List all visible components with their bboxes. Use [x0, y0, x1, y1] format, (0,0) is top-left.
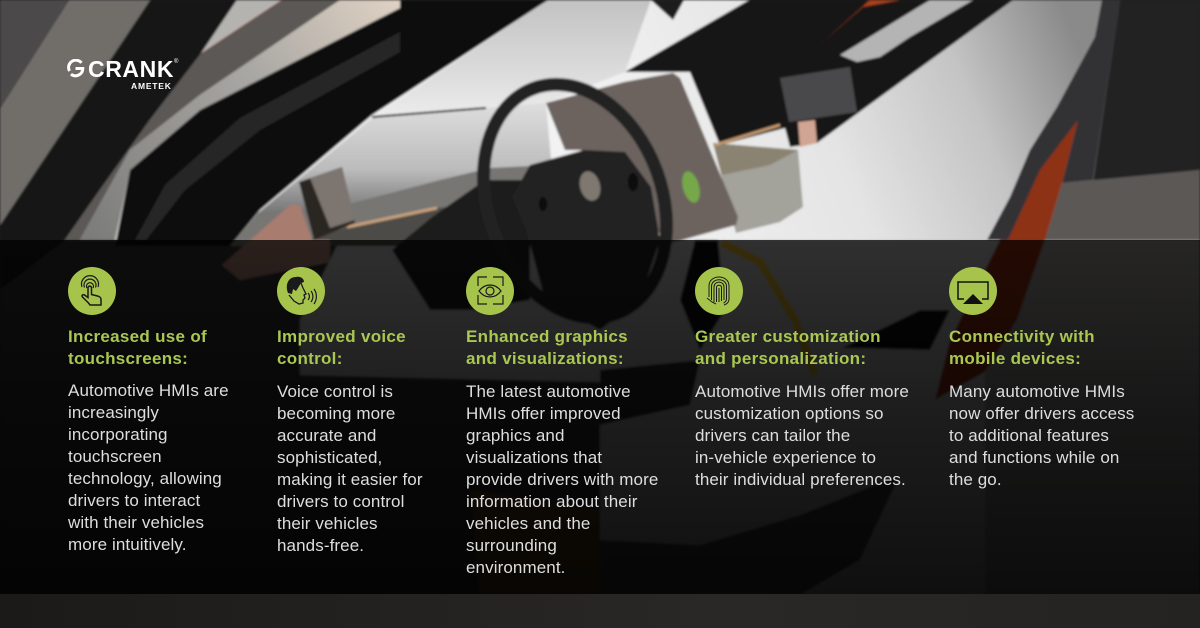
logo: Crank Ametek — [67, 56, 178, 91]
body text: becoming more — [277, 404, 395, 423]
body text: graphics and — [466, 426, 565, 445]
heading — [695, 327, 881, 368]
icon: screen mirroring — [949, 267, 997, 315]
heading: mobile devices: — [949, 349, 1081, 368]
body text: hands-free. — [277, 536, 364, 555]
body text: drivers to interact — [68, 491, 200, 510]
heading: Enhanced graphics — [466, 327, 628, 346]
heading: touchscreens: — [68, 349, 188, 368]
heading: Greater customization — [695, 327, 881, 346]
body text — [949, 382, 1134, 489]
body text: provide drivers with more — [466, 470, 658, 489]
body text: sophisticated, — [277, 448, 382, 467]
heading — [949, 327, 1095, 368]
body text: HMIs offer improved — [466, 404, 621, 423]
body text: environment. — [466, 558, 565, 577]
body text: now offer drivers access — [949, 404, 1134, 423]
body text: making it easier for — [277, 470, 423, 489]
body text: Automotive HMIs are — [68, 381, 229, 400]
body text: The latest automotive — [466, 382, 631, 401]
body text: Many automotive HMIs — [949, 382, 1125, 401]
heading — [466, 327, 628, 368]
body text — [68, 381, 229, 554]
body text: Voice control is — [277, 382, 393, 401]
heading — [68, 327, 207, 368]
body text: and functions while on — [949, 448, 1119, 467]
heading: and personalization: — [695, 349, 866, 368]
column: customization — [695, 267, 909, 489]
heading: Connectivity with — [949, 327, 1095, 346]
body text: accurate and — [277, 426, 376, 445]
body text: surrounding — [466, 536, 557, 555]
body text: incorporating — [68, 425, 168, 444]
heading: and visualizations: — [466, 349, 624, 368]
body text: with their vehicles — [68, 513, 204, 532]
icon: fingerprint — [695, 267, 743, 315]
body text — [277, 382, 423, 555]
heading: control: — [277, 349, 343, 368]
logo: Crank Ametek: AMETEK — [131, 81, 172, 91]
heading: Increased use of — [68, 327, 207, 346]
column: touchscreens — [68, 267, 229, 554]
body text: increasingly — [68, 403, 159, 422]
icon: eye scan — [466, 267, 514, 315]
body text: visualizations that — [466, 448, 602, 467]
body text — [695, 382, 909, 489]
body text: the go. — [949, 470, 1002, 489]
body text: drivers can tailor the — [695, 426, 850, 445]
icon: speaking head — [277, 267, 325, 315]
body text: technology, allowing — [68, 469, 222, 488]
body text: drivers to control — [277, 492, 404, 511]
logo: Crank Ametek: CRANK — [88, 56, 174, 82]
body text: customization options so — [695, 404, 884, 423]
body text: Automotive HMIs offer more — [695, 382, 909, 401]
body text: to additional features — [949, 426, 1109, 445]
column: voice control — [277, 267, 423, 555]
logo: Crank Ametek: ® — [174, 59, 178, 65]
heading: Improved voice — [277, 327, 406, 346]
body text — [466, 382, 658, 577]
body text: their vehicles — [277, 514, 378, 533]
column: graphics — [466, 267, 658, 577]
body text: more intuitively. — [68, 535, 187, 554]
body text: their individual preferences. — [695, 470, 906, 489]
body text: information about their — [466, 492, 637, 511]
heading — [277, 327, 406, 368]
body text: vehicles and the — [466, 514, 590, 533]
body text: in-vehicle experience to — [695, 448, 876, 467]
body text: touchscreen — [68, 447, 162, 466]
icon: touch hand — [68, 267, 116, 315]
column: connectivity — [949, 267, 1134, 489]
